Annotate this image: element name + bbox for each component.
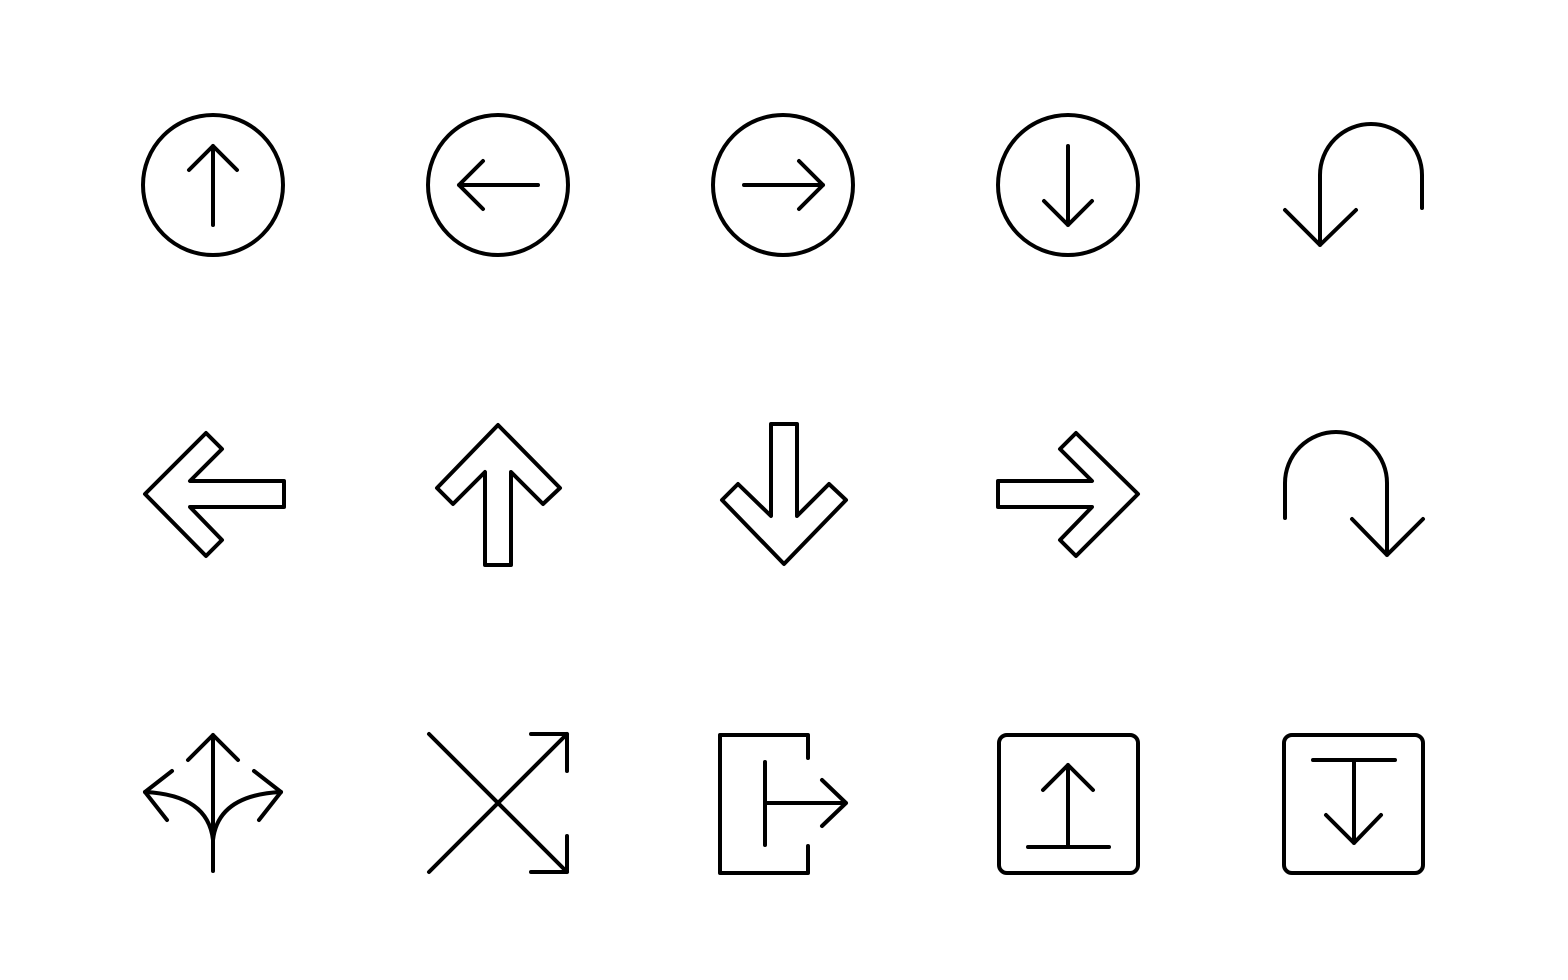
icon: block arrow down <box>722 424 846 564</box>
icon: circle arrow right <box>713 115 853 255</box>
icon: circle arrow down <box>998 115 1138 255</box>
icon: three-way split <box>145 735 281 871</box>
icon: upload box <box>999 735 1138 873</box>
icon: block arrow up <box>437 425 560 565</box>
icon: download box <box>1284 735 1423 873</box>
icon: shuffle <box>429 734 567 872</box>
icon: block arrow right <box>998 433 1138 556</box>
icon: circle arrow up <box>143 115 283 255</box>
icon: u-turn left down <box>1285 124 1422 245</box>
icon: u-turn right down <box>1285 432 1423 555</box>
icon: exit door <box>720 735 846 873</box>
icon: block arrow left <box>145 433 284 556</box>
icon: circle arrow left <box>428 115 568 255</box>
